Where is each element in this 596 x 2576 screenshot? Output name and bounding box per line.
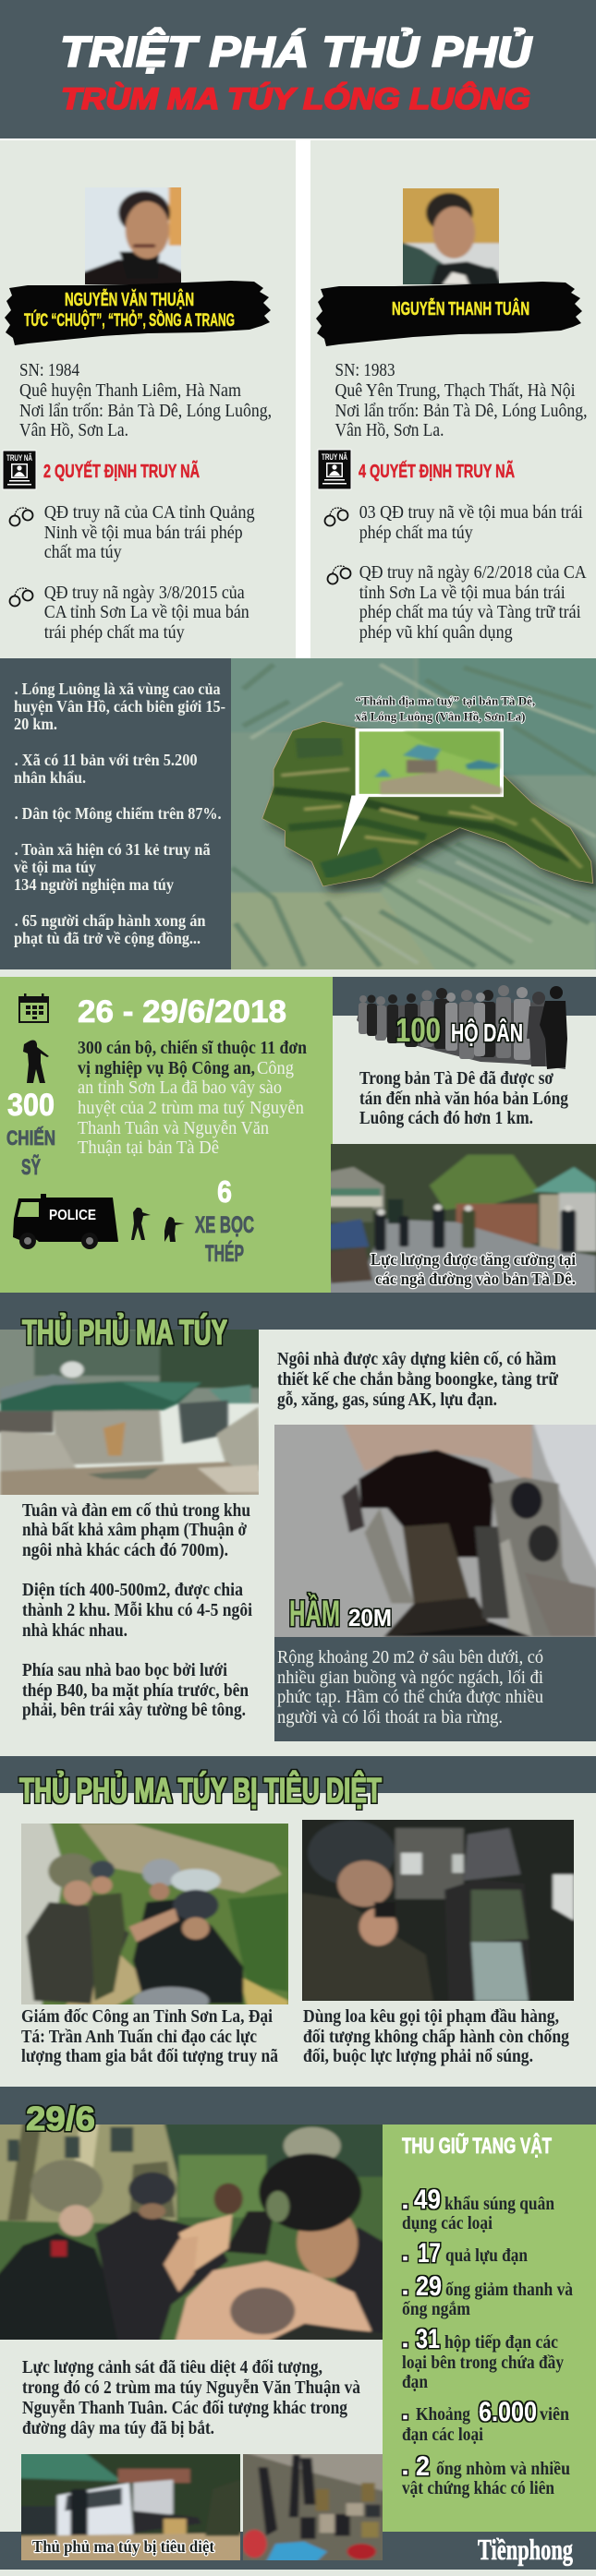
icon: wanted poster	[318, 450, 351, 489]
tunnel description box	[274, 1637, 596, 1741]
wanted decision 1: Ninh về tội mua bán trái phép	[44, 524, 243, 543]
tunnel label: 20M	[348, 1604, 392, 1631]
wanted decision 2	[359, 563, 587, 643]
panel: commune facts: . Toàn xã hiện có 31 kẻ truy nã	[15, 840, 211, 859]
panel: commune facts	[0, 658, 231, 969]
personal details: Quê Yên Trung, Thạch Thất, Hà Nội	[334, 381, 576, 401]
page band under map	[0, 969, 596, 977]
item: 49 guns: 49	[414, 2185, 441, 2215]
item: 17 grenades	[403, 2238, 528, 2269]
item: 29 silencers	[402, 2271, 573, 2319]
wanted decision 1	[44, 503, 255, 562]
panel: commune facts: . Xã có 11 bản với trên 5.200	[15, 751, 198, 769]
panel: commune facts: 20 km.	[14, 715, 57, 733]
item: 17 grenades: 17	[418, 2238, 441, 2269]
item: 31 magazine boxes: loại bên trong chứa đầy	[402, 2353, 564, 2373]
item: 29 silencers: 29	[416, 2271, 442, 2302]
stronghold description: thành 2 khu. Mỗi khu có 4-5 ngôi	[22, 1601, 253, 1620]
icon: handcuffs	[9, 508, 33, 526]
icon: police truck	[13, 1194, 118, 1249]
panel: Nguyễn Văn Thuận	[0, 140, 296, 658]
icon: wanted poster: TRUY NÃ	[6, 453, 32, 463]
panel: commune facts: huyện Vân Hồ, cách biên giới 15-	[14, 697, 225, 716]
raid description: huyệt của 2 trùm ma tuý Nguyễn	[78, 1099, 304, 1118]
item: 6000 bullets: đạn các loại	[402, 2426, 484, 2445]
caption: commander	[21, 2007, 278, 2066]
personal details: SN: 1984	[19, 361, 79, 380]
raid description: Thuận tại bản Tà Dê	[78, 1138, 219, 1158]
wanted decision 1: 03 QĐ truy nã về tội mua bán trái	[359, 503, 583, 523]
title line 2: TRÙM MA TÚY LÓNG LUÔNG	[61, 82, 530, 115]
stronghold description: phải, bên trái xây tường bê tông.	[22, 1701, 246, 1720]
raid description: vị nghiệp vụ Bộ Công an,	[78, 1059, 255, 1078]
stat label: sỹ: SỸ	[21, 1154, 41, 1180]
panel: commune facts: phạt tù đã trở về cộng đồng...	[14, 929, 201, 947]
personal details	[19, 361, 272, 440]
wanted decision 2: CA tỉnh Sơn La về tội mua bán	[44, 603, 249, 622]
icon: wanted poster: TRUY NÃ	[322, 452, 347, 462]
stronghold description: Tuân và đàn em cố thủ trong khu	[22, 1501, 250, 1521]
stat: 100: 100	[395, 1011, 441, 1049]
evacuation text: tán đến nhà văn hóa bản Lóng	[359, 1089, 568, 1109]
personal details	[334, 361, 588, 440]
icon: soldier kneeling	[164, 1217, 185, 1242]
icon: soldier aiming	[131, 1208, 151, 1240]
stronghold description: ngôi nhà khác cách đó 700m).	[22, 1541, 228, 1560]
personal details: Vân Hồ, Sơn La.	[334, 421, 444, 440]
icon: handcuffs	[327, 566, 351, 584]
heading: 2 wanted decisions: 2 QUYẾT ĐỊNH TRUY NÃ	[43, 461, 200, 482]
icon: handcuffs	[325, 508, 347, 526]
section: 29/6 outcome	[0, 2087, 596, 2576]
section: drug stronghold	[0, 1293, 596, 1756]
panel: seized evidence	[383, 2125, 596, 2532]
stronghold description: nhà khác nhau.	[22, 1621, 128, 1641]
date: 26 - 29/6/2018	[78, 994, 286, 1029]
raid description: 300 cán bộ, chiến sĩ thuộc 11 đơn	[78, 1039, 307, 1058]
outcome text	[22, 2358, 360, 2438]
photo: arrest	[0, 2125, 383, 2340]
item: 17 grenades: quả lựu đạn	[445, 2246, 528, 2266]
item: 6000 bullets: 6.000	[479, 2397, 537, 2427]
icon: handcuffs	[9, 588, 33, 606]
wanted decision 2: phép chất ma túy và Tàng trữ trái	[359, 603, 581, 622]
crowd silhouettes	[357, 985, 567, 1069]
photo caption: các ngả đường vào bản Tà Dê.	[375, 1270, 576, 1288]
item: 2 binoculars: 2	[416, 2451, 430, 2482]
wanted decision 2: QĐ truy nã ngày 3/8/2015 của	[44, 584, 245, 603]
photo: tunnel	[274, 1425, 596, 1637]
tunnel description box: nhiều gian buồng và ngóc ngách, lối đi	[277, 1668, 544, 1688]
photo: seized weapons	[243, 2454, 383, 2560]
portrait: Nguyễn Thanh Tuân	[403, 188, 499, 284]
heading: date 29/6: 29/6	[26, 2100, 95, 2137]
panel: commune facts: 134 người nghiện ma túy	[14, 875, 174, 894]
item: 2 binoculars: vật chứng khác có liên	[402, 2479, 554, 2498]
evacuation text: Luông cách đó hơn 1 km.	[359, 1109, 533, 1128]
item: 29 silencers: ống ngắm	[402, 2300, 470, 2319]
bunker description: Ngôi nhà được xây dựng kiên cố, có hầm	[277, 1350, 556, 1369]
tunnel description box: phức tạp. Hầm có thể chứa được nhiều	[277, 1688, 543, 1707]
item: 31 magazine boxes: hộp tiếp đạn các	[444, 2333, 558, 2353]
caption: commander: lượng tham gia bắt đối tượng truy nã	[21, 2047, 278, 2066]
stronghold description	[22, 1501, 253, 1720]
map caption	[356, 695, 536, 724]
caption: loudspeaker: Dùng loa kêu gọi tội phạm đầu hàng,	[303, 2007, 559, 2027]
item: 49 guns: khẩu súng quân	[444, 2195, 554, 2214]
commune shadow	[270, 729, 596, 893]
bunker description: gỗ, xăng, gas, súng AK, lựu đạn.	[277, 1390, 497, 1410]
item: 31 magazine boxes	[402, 2324, 564, 2392]
caption: commander: Giám đốc Công an Tỉnh Sơn La, Đại	[21, 2007, 274, 2027]
raid description: an tỉnh Sơn La đã bao vây sào	[78, 1078, 282, 1098]
item: 29 silencers: ống giảm thanh và	[445, 2281, 573, 2300]
outcome text: Lực lượng cảnh sát đã tiêu diệt 4 đối tượng,	[22, 2358, 322, 2377]
item: 49 guns	[402, 2185, 554, 2233]
wanted decision 1	[359, 503, 583, 543]
panel: commune facts: về tội ma túy	[14, 858, 96, 876]
photo caption: Lực lượng được tăng cường tại	[371, 1250, 576, 1269]
item: 49 guns: dụng các loại	[402, 2214, 493, 2233]
name: NGUYỄN VĂN THUẬN	[65, 288, 194, 310]
portrait: Nguyễn Văn Thuận	[85, 187, 181, 284]
wanted decision 2: tỉnh Sơn La về tội mua bán trái	[359, 584, 566, 603]
item: 2 binoculars: ống nhòm và nhiều	[436, 2460, 570, 2479]
panel: Nguyễn Thanh Tuân	[310, 140, 596, 658]
item: 6000 bullets	[402, 2397, 569, 2445]
panel: commune facts: . Dân tộc Mông chiếm trên 87%.	[15, 804, 222, 823]
panel: commune facts: nhân khẩu.	[14, 768, 86, 787]
heading: 4 wanted decisions: 4 QUYẾT ĐỊNH TRUY NÃ	[359, 461, 515, 482]
panel: commune facts: . 65 người chấp hành xong án	[15, 911, 206, 930]
outcome text: Nguyễn Thanh Tuân. Các đối tượng khác trong	[22, 2399, 347, 2418]
bunker description	[277, 1350, 558, 1410]
raid description: Công	[257, 1059, 294, 1078]
photo: commander directing officers	[21, 1824, 288, 2004]
panel: 100 households evacuated	[333, 977, 596, 1145]
tunnel label: HẦM	[289, 1592, 340, 1634]
personal details: SN: 1983	[334, 361, 395, 380]
wanted decision 1: QĐ truy nã của CA tỉnh Quảng	[44, 503, 255, 523]
item: 6000 bullets: viên	[540, 2405, 569, 2425]
stronghold description: Diện tích 400-500m2, được chia	[22, 1581, 243, 1600]
wanted decision 2: trái phép chất ma túy	[44, 623, 185, 643]
personal details: Nơi lẩn trốn: Bản Tà Dê, Lóng Luông,	[19, 402, 272, 421]
map: Lóng Luông commune	[231, 658, 596, 969]
caption: loudspeaker: đối, buộc lực lượng phải nổ súng.	[303, 2047, 533, 2066]
personal details: Quê huyện Thanh Liêm, Hà Nam	[19, 381, 241, 401]
item: 6000 bullets: Khoảng	[416, 2405, 470, 2425]
photo: officer with radio in vehicle	[302, 1820, 574, 2001]
section: stronghold destroyed	[0, 1756, 596, 2087]
icon: calendar	[18, 993, 49, 1022]
commune area	[262, 721, 593, 886]
caption: loudspeaker: đối tượng không chấp hành còn chống	[303, 2028, 569, 2047]
icon: police truck: POLICE	[49, 1208, 96, 1223]
stat: 300: 300	[7, 1088, 55, 1123]
raid description: Thanh Tuân và Nguyễn Văn	[78, 1119, 269, 1138]
header banner	[0, 0, 596, 138]
tunnel description box: Rộng khoảng 20 m2 ở sâu bên dưới, có	[277, 1648, 543, 1667]
name: NGUYỄN THANH TUÂN	[392, 297, 529, 319]
photo: tow truck at the site	[21, 2454, 240, 2560]
evacuation text: Trong bản Tà Dê đã được sơ	[359, 1069, 553, 1089]
heading: stronghold: THỦ PHỦ MA TÚY	[22, 1312, 227, 1353]
raid description	[78, 1039, 307, 1158]
outcome text: trong đó có 2 trùm ma túy Nguyễn Văn Thuận và	[22, 2378, 360, 2398]
map caption: xã Lóng Luông (Vân Hồ, Sơn La)	[356, 711, 526, 724]
photo caption	[371, 1250, 576, 1288]
photo: wrecked house	[0, 1330, 259, 1495]
wanted decision 1: chất ma túy	[44, 543, 122, 562]
personal details: Vân Hồ, Sơn La.	[19, 421, 128, 440]
caption: commander: Tá: Trần Anh Tuấn chỉ đạo các lực	[21, 2028, 257, 2047]
outcome text: đường dây ma túy đã bị bắt.	[22, 2419, 214, 2438]
name banner: brush stroke	[5, 281, 271, 345]
stat label: thép: THÉP	[205, 1240, 244, 1267]
photo caption: Thủ phủ ma túy bị tiêu diệt	[32, 2537, 214, 2556]
stat label: hộ dân: HỘ DÂN	[451, 1017, 523, 1047]
stronghold description: thép B40, ba mặt phía trước, bên	[22, 1681, 249, 1701]
icon: soldier	[23, 1040, 49, 1083]
name banner: brush stroke	[316, 282, 582, 346]
callout pointer	[337, 795, 370, 856]
stronghold description: nhà bất khả xâm phạm (Thuận ở	[22, 1521, 247, 1540]
item: 31 magazine boxes: 31	[416, 2324, 440, 2354]
wanted decision 1: phép chất ma túy	[359, 524, 473, 543]
item: 2 binoculars	[402, 2451, 570, 2498]
panel: raid forces	[0, 977, 333, 1293]
tunnel description box: người và có lối thoát ra bìa rừng.	[277, 1708, 503, 1727]
map caption: “Thánh địa ma tuý” tại bản Tà Dê,	[356, 695, 536, 708]
wanted decision 2: phép vũ khí quân dụng	[359, 623, 513, 643]
wanted decision 2	[44, 584, 249, 643]
caption: loudspeaker	[303, 2007, 569, 2066]
title line 1: TRIỆT PHÁ THỦ PHỦ	[60, 28, 533, 76]
stat label: chiến: CHIẾN	[6, 1126, 55, 1150]
stat label: xe bọc: XE BỌC	[195, 1212, 254, 1238]
inset photo	[356, 728, 504, 797]
photo: police on village road	[331, 1144, 596, 1293]
evacuation text	[359, 1069, 568, 1128]
item: 31 magazine boxes: đạn	[402, 2373, 428, 2392]
icon: wanted poster	[3, 451, 36, 489]
panel: commune facts: . Lóng Luông là xã vùng cao của	[15, 680, 221, 698]
stat: 6: 6	[217, 1174, 232, 1209]
stronghold description: Phía sau nhà bao bọc bởi lưới	[22, 1661, 228, 1680]
heading: stronghold destroyed: THỦ PHỦ MA TÚY BỊ TIÊU DIỆT	[19, 1770, 382, 1811]
alias: TỨC “CHUỘT”, “THỎ”, SỒNG A TRANG	[24, 310, 235, 331]
bunker description: thiết kế che chắn bằng boongke, tàng trữ	[277, 1370, 558, 1390]
